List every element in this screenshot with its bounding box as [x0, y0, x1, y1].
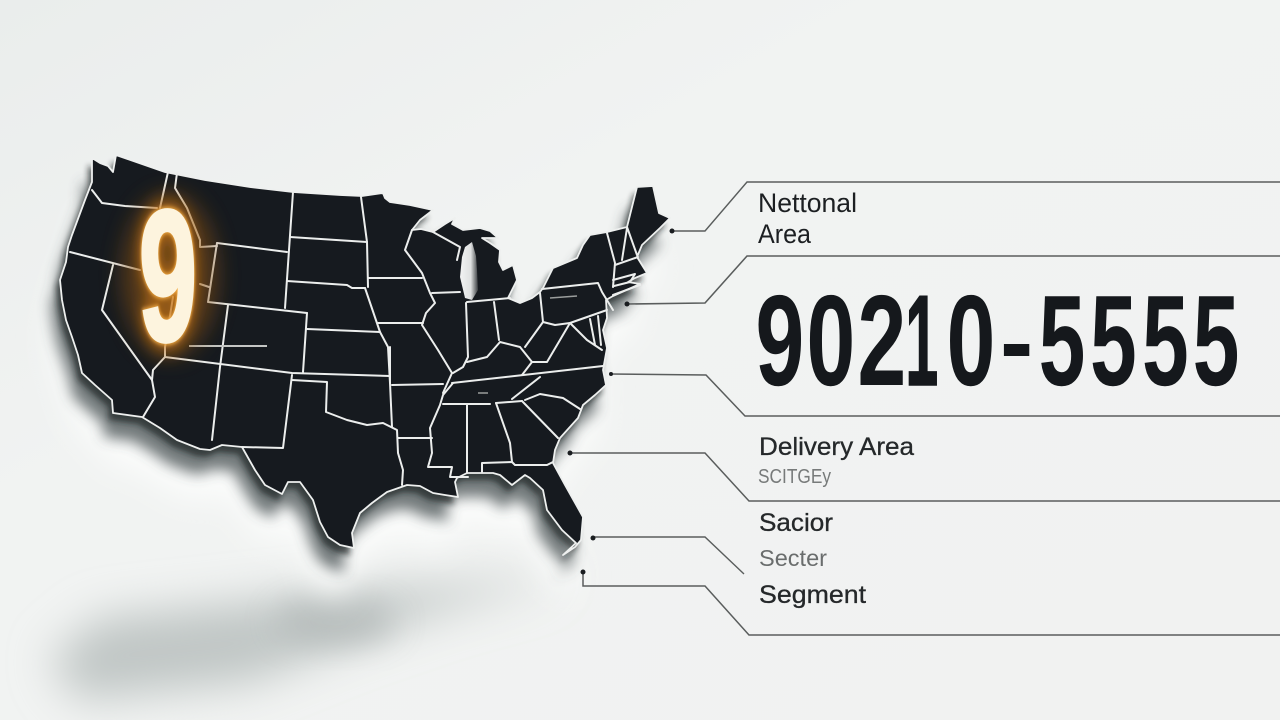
large ZIP code [755, 269, 1239, 413]
glow rim: 9 [139, 172, 197, 379]
faint stray marks on map [190, 296, 577, 393]
glow halo: 9 [139, 172, 197, 379]
label second line: Area [758, 219, 812, 249]
outer warm glow [122, 193, 218, 357]
map land [60, 155, 670, 555]
anchor dot [624, 302, 630, 306]
digit 1: 1 [905, 269, 938, 413]
state borders [70, 172, 640, 485]
white halo under map [52, 205, 662, 605]
lower leader line [610, 374, 1280, 416]
map contact shadow [56, 162, 666, 562]
digits 5555: 5555 [1039, 270, 1239, 413]
label: Sacior [759, 509, 833, 537]
anchor dot [590, 536, 596, 540]
leader line [583, 572, 1280, 635]
leader line [570, 453, 1280, 501]
label: Nettonal [758, 188, 857, 218]
lower anchor dot [609, 372, 613, 376]
map of the United States [51, 155, 670, 605]
callout: delivery area [568, 433, 1280, 501]
anchor dot [580, 570, 586, 574]
sublabel: Secter [759, 545, 827, 571]
glowing 9 [122, 172, 218, 379]
hyphen: - [1000, 286, 1033, 398]
callout: national area [670, 182, 1280, 249]
callout: segment [580, 570, 1280, 635]
leader line [627, 256, 1280, 304]
map drop shadow [51, 179, 661, 579]
anchor dot [670, 228, 674, 234]
shadow core [275, 600, 395, 644]
anchor dot [568, 450, 572, 456]
digit 0: 0 [947, 269, 995, 413]
leader line [672, 182, 1280, 231]
numeral: 9 [139, 172, 197, 379]
digits 902: 902 [755, 269, 906, 413]
label: Delivery Area [759, 433, 914, 461]
leader line [593, 537, 744, 574]
ground shadow beneath map [50, 577, 565, 700]
label: Segment [759, 581, 866, 609]
broad shadow [50, 577, 565, 700]
callout: zip code [609, 256, 1280, 416]
Lake Michigan [460, 242, 478, 300]
callout: sector [590, 509, 833, 574]
sublabel: SCITGEy [758, 466, 831, 488]
